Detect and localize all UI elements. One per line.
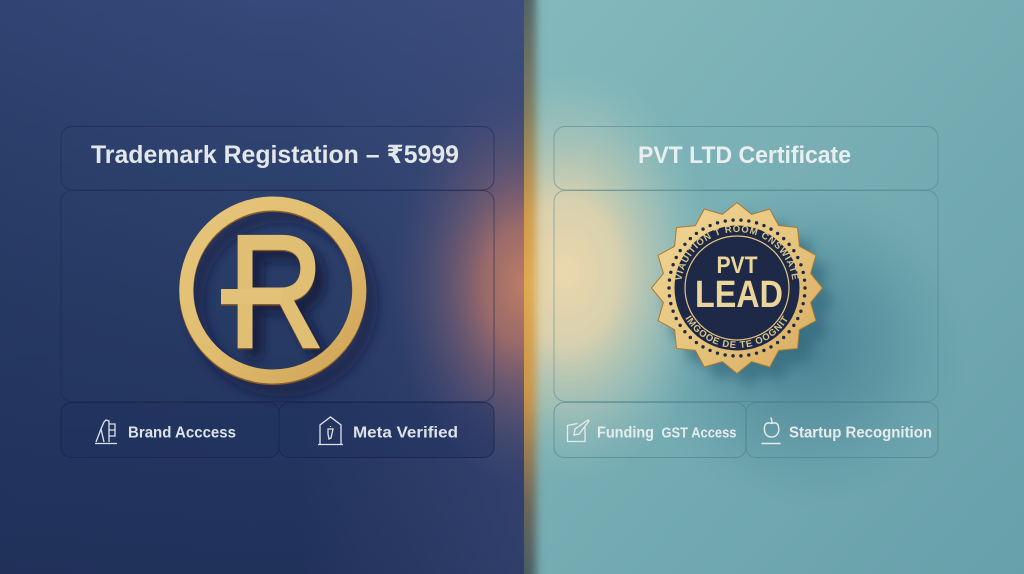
feature: meta verified: Meta Verified (353, 424, 458, 442)
icon: registered trademark symbol: R (228, 204, 324, 383)
icon: gold seal badge: VIAUITION T ROOM CNSWIATE (675, 226, 799, 280)
heading panel: pvt ltd (554, 126, 938, 190)
feature: meta verified (279, 402, 494, 458)
icon: registered trademark symbol (186, 203, 370, 392)
icon: gold seal badge: IMGOOE DE TE OOGNIT (686, 315, 788, 348)
feature: brand access (61, 402, 279, 458)
heading panel: pvt ltd: PVT LTD Certificate (638, 142, 851, 169)
panel: certificate badge (554, 190, 938, 402)
icon: gold seal badge (651, 202, 834, 387)
feature: funding gst access: Funding (597, 424, 654, 442)
panel: registered symbol (61, 190, 494, 402)
panel: pvt ltd certificate (554, 126, 938, 458)
icon: gold seal badge: LEAD (695, 274, 783, 316)
feature: funding gst access (554, 402, 746, 458)
icon: funding pencil note (568, 420, 589, 442)
panel: trademark registration (61, 126, 494, 458)
heading panel: trademark: Trademark Registation – ₹5999 (91, 141, 459, 169)
icon: brand access (95, 420, 117, 444)
icon: registered trademark symbol: R (238, 213, 334, 392)
icon: meta verified house (318, 417, 343, 444)
feature: startup recognition: Startup Recognition (789, 424, 932, 442)
heading panel: trademark (61, 126, 494, 190)
icon: gold seal badge: PVT (716, 252, 758, 279)
icon: registered trademark symbol: R (228, 203, 324, 381)
icon: startup apple (762, 418, 780, 444)
feature: funding gst access: GST Access (662, 426, 736, 442)
feature: startup recognition (746, 402, 938, 458)
feature: brand access: Brand Acccess (128, 424, 236, 442)
